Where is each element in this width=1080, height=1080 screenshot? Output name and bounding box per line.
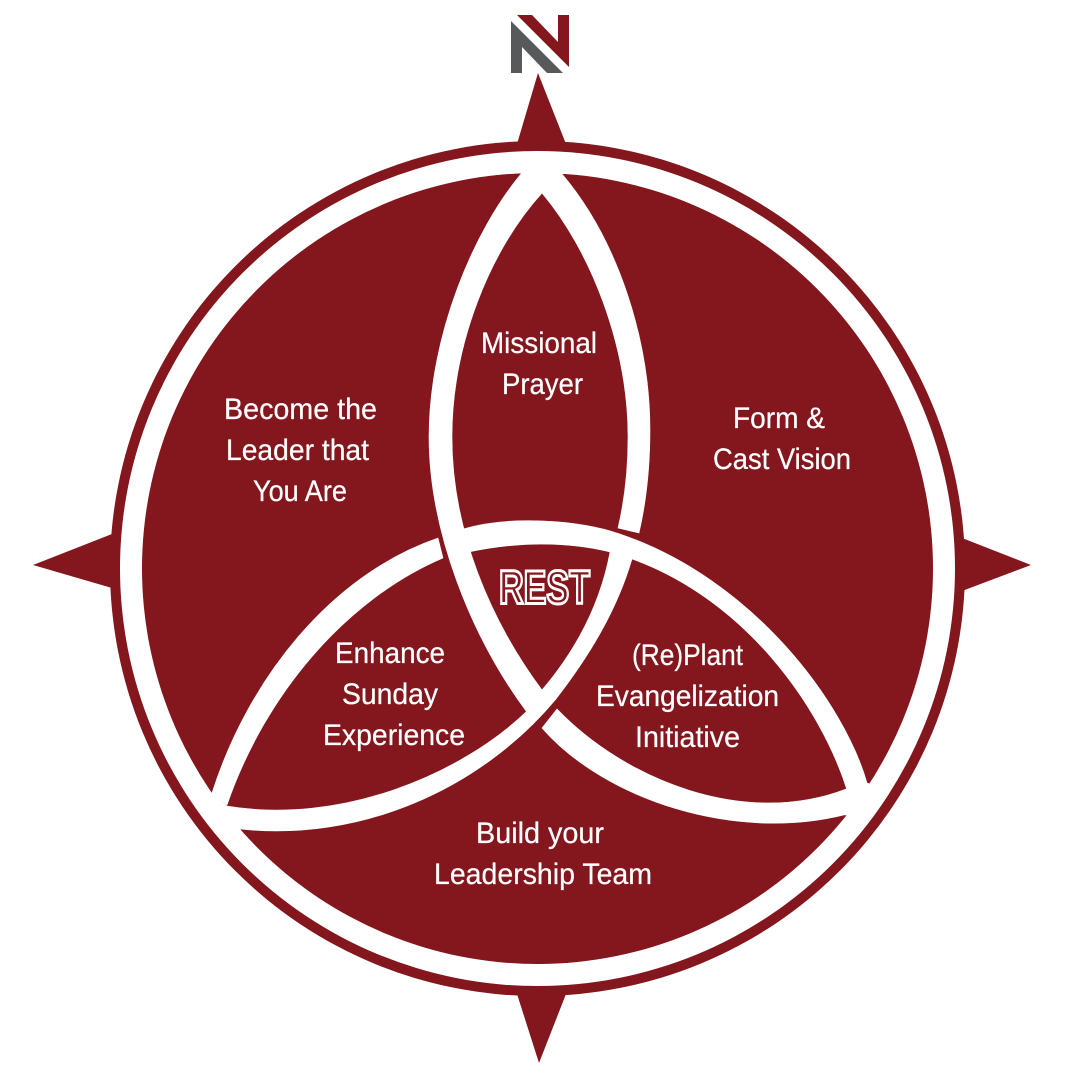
text: (Re)Plant Evangelization Initiative <box>596 639 779 754</box>
text: (Re)Plant Evangelization Initiative: (Re)Plant <box>632 639 744 672</box>
text: Missional Prayer <box>481 327 597 401</box>
text: (Re)Plant Evangelization Initiative: Initiative <box>635 721 740 754</box>
text: Build your Leadership Team: Leadership Team <box>434 858 652 891</box>
text: Enhance Sunday Experience: Enhance <box>335 637 445 670</box>
text: Become the Leader that You Are <box>224 393 377 508</box>
text: Become the Leader that You Are: You Are <box>253 475 347 508</box>
text: Form and Cast Vision <box>713 402 851 476</box>
text: Build your Leadership Team: Build your <box>476 817 604 850</box>
text: Form and Cast Vision: Cast Vision <box>713 443 851 476</box>
text: Become the Leader that You Are: Leader that <box>226 434 370 467</box>
text: Missional Prayer: Missional <box>481 327 597 360</box>
panel: maroon inner disc <box>142 173 933 964</box>
text: Missional Prayer: Prayer <box>502 368 583 401</box>
compass ring <box>110 141 965 996</box>
text: Enhance Sunday Experience <box>323 637 465 752</box>
text: Enhance Sunday Experience: Experience <box>323 719 465 752</box>
text: REST outlined centre label: REST <box>499 560 590 614</box>
text: Enhance Sunday Experience: Sunday <box>342 678 438 711</box>
text: Form and Cast Vision: Form & <box>733 402 825 435</box>
text: (Re)Plant Evangelization Initiative: Evangelization <box>596 680 779 713</box>
interwoven white trinity bands <box>195 172 885 831</box>
text: Build your Leadership Team <box>434 817 652 891</box>
icon: N logo <box>511 15 569 73</box>
text: Become the Leader that You Are: Become the <box>224 393 377 426</box>
